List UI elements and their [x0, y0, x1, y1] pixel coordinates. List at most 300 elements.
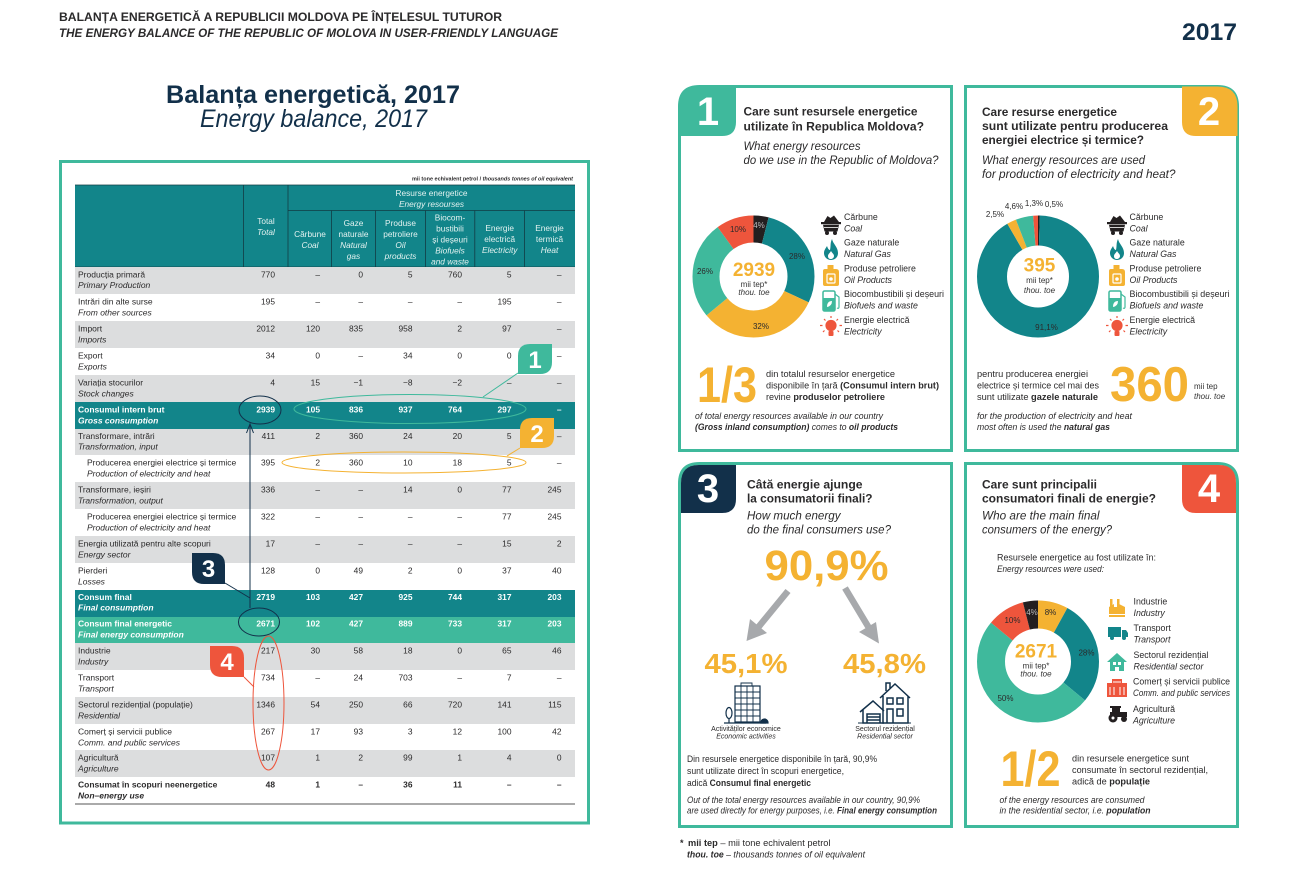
row: gross consumption	[75, 402, 575, 429]
legend 2: Cărbune	[1130, 212, 1163, 222]
row: production of electricity and heat, input: 5	[507, 458, 512, 468]
row: industry: 46	[552, 646, 562, 656]
donut chart 4: 28%	[1078, 648, 1095, 658]
takeaway text 2: sunt utilizate gazele naturale	[977, 392, 1098, 402]
legend 2: Electricity	[1130, 326, 1168, 336]
row: residential: 66	[403, 700, 413, 710]
row: losses: 37	[502, 566, 512, 576]
row: commercial and public services: 17	[311, 726, 320, 736]
row: production of electricity and heat, output: 322	[261, 512, 275, 522]
table header: Energie	[535, 223, 564, 233]
heading 2: sunt utilizate pentru producerea	[982, 119, 1168, 133]
row: production of electricity and heat, input: 10	[403, 458, 413, 468]
heading 1: do we use in the Republic of Moldova?	[744, 153, 939, 167]
row: losses: Pierderi	[78, 566, 107, 576]
row: commercial and public services: 12	[453, 726, 462, 736]
row: primary production: Primary Production	[78, 280, 151, 290]
panel 2: electricity and heat production	[966, 86, 1238, 450]
row: transformation input: 20	[453, 431, 462, 441]
figure 45,8%: 45,8%	[843, 648, 926, 679]
heading 2: Care resurse energetice	[982, 105, 1117, 119]
row: other sources: 195	[261, 296, 275, 306]
table header: electrică	[484, 234, 516, 244]
row: gross consumption: 297	[498, 404, 512, 414]
donut chart 2: thou. toe	[1024, 286, 1056, 295]
row: gross consumption: Consumul intern brut	[78, 404, 165, 414]
row: transformation output: –	[315, 484, 320, 494]
callout 2 with ellipse: 2	[530, 421, 544, 448]
row: non-energy use: Non–energy use	[78, 790, 144, 800]
row: residential: 720	[448, 700, 462, 710]
badge 1	[680, 86, 736, 136]
heading 1: Care sunt resursele energetice	[744, 104, 918, 118]
row: agriculture: 2	[358, 752, 363, 762]
row: commercial and public services: 267	[261, 726, 275, 736]
row: final consumption: 203	[548, 592, 562, 602]
row: transport: 703	[399, 672, 413, 682]
unit note: mii tone echivalent petrol / thousands tonnes of oil equivalent	[412, 176, 573, 182]
donut chart 4: 8%	[1045, 608, 1056, 617]
legend 2	[1106, 212, 1230, 336]
legend 4	[1107, 596, 1231, 726]
donut chart 1: 28%	[789, 252, 805, 261]
row: transport: –	[457, 672, 462, 682]
heading 3: do the final consumers use?	[747, 522, 891, 536]
donut chart 1	[697, 221, 805, 331]
row: commercial and public services: Comm. and public services	[78, 738, 181, 748]
legend 2: Produse petroliere	[1130, 264, 1201, 274]
row: gross consumption: 105	[306, 404, 320, 414]
table header: Total	[257, 227, 276, 237]
row: non-energy use: 1	[315, 780, 320, 790]
row: transport: Transport	[78, 684, 114, 694]
table header: Heat	[541, 245, 559, 255]
heading 4: consumatori finali de energie?	[982, 492, 1156, 506]
table header: Coal	[301, 240, 320, 250]
donut chart 2: mii tep*	[1026, 276, 1053, 285]
row: transformation output	[75, 482, 575, 509]
row: final consumption: 2719	[256, 592, 275, 602]
row: agriculture: 1	[315, 752, 320, 762]
unit note 360: thou. toe	[1194, 392, 1226, 401]
row: residential: 115	[548, 700, 562, 710]
table header: Natural	[340, 240, 368, 250]
panel: energy balance table	[60, 162, 588, 823]
donut chart 1: thou. toe	[738, 288, 770, 297]
row: production of electricity and heat, input	[87, 458, 562, 478]
row: stock changes: Stock changes	[78, 388, 135, 398]
row: non-energy use: Consumat în scopuri neenergetice	[78, 780, 218, 790]
row: industry: 58	[354, 646, 363, 656]
row: exports: 0	[507, 350, 512, 360]
icon: office building	[724, 683, 768, 723]
row: production of electricity and heat, input: 18	[453, 458, 462, 468]
row: other sources: From other sources	[78, 308, 152, 318]
icon: house	[1107, 653, 1127, 671]
legend 2: Biofuels and waste	[1130, 300, 1203, 310]
row: transport: 7	[507, 672, 512, 682]
donut chart 4: mii tep*	[1023, 662, 1049, 670]
footnote	[680, 838, 865, 860]
callout 1 with ellipse	[294, 344, 552, 424]
row: production of electricity and heat, input: 395	[261, 458, 275, 468]
takeaway text 1: din totalul resurselor energetice	[766, 369, 895, 379]
row: stock changes: 4	[270, 378, 275, 388]
row: industry: 30	[311, 646, 320, 656]
heading 3: la consumatorii finali?	[747, 492, 872, 506]
row: production of electricity and heat, output: Producerea energiei electrice și termice	[87, 512, 237, 522]
row: imports: 958	[399, 324, 413, 334]
icon: public building	[1107, 679, 1127, 697]
takeaway text 4: adică de populație	[1072, 776, 1150, 786]
icon: truck	[1108, 627, 1128, 640]
legend 2: Biocombustibili și deșeuri	[1130, 289, 1230, 299]
icon: residential house	[858, 683, 911, 723]
footnote: thou. toe – thousands tonnes of oil equivalent	[687, 850, 865, 860]
row: production of electricity and heat, output: –	[408, 512, 413, 522]
takeaway text 1: (Gross inland consumption) comes to oil products	[695, 422, 898, 432]
heading 2: energiei electrice și termice?	[982, 133, 1144, 147]
row: transformation input: 360	[349, 431, 363, 441]
row: production of electricity and heat, input: 360	[349, 458, 363, 468]
donut chart 2: 1,3%	[1025, 199, 1043, 208]
row: other sources: –	[457, 296, 462, 306]
legend 1: Biocombustibili și deșeuri	[844, 289, 944, 299]
donut chart 1: mii tep*	[741, 280, 767, 289]
table header: termică	[536, 234, 563, 244]
row: other sources: 195	[498, 296, 512, 306]
legend 2: Coal	[1130, 224, 1149, 234]
table header: products	[384, 251, 416, 261]
row: transformation output: Transformare, ieșiri	[78, 484, 151, 494]
takeaway text 4: din resursele energetice sunt	[1072, 754, 1190, 764]
row: non-energy use: –	[358, 780, 363, 790]
row: transport: –	[557, 672, 562, 682]
donut chart 2: 395	[1024, 256, 1056, 276]
row: final consumption: 744	[448, 592, 462, 602]
table header	[75, 185, 575, 267]
row: other sources: –	[315, 296, 320, 306]
key figure 1/3: 1/3	[697, 357, 757, 413]
row: commercial and public services: 42	[552, 726, 562, 736]
row: exports: 34	[403, 350, 413, 360]
row: transformation output: Transformation, output	[78, 496, 164, 506]
arrow left	[746, 591, 788, 641]
row: losses: 49	[354, 566, 363, 576]
table header: Total	[257, 216, 275, 226]
row: final consumption: Consum final	[78, 592, 132, 602]
table header: bustibili	[436, 224, 464, 234]
row: gross consumption: 937	[399, 404, 413, 414]
heading 3	[747, 478, 891, 536]
legend 1: Natural Gas	[844, 249, 892, 259]
row: residential: 141	[498, 700, 512, 710]
takeaway text 4	[1000, 754, 1208, 816]
caption: economic activities: Activităților economice	[711, 726, 781, 733]
row: exports: Exports	[78, 362, 108, 372]
row: gross consumption: Gross consumption	[78, 416, 158, 426]
row: transformation output: 336	[261, 484, 275, 494]
row: losses	[78, 566, 562, 586]
caption: economic activities	[711, 726, 781, 740]
legend 1: Produse petroliere	[844, 264, 916, 274]
row: final consumption: 317	[498, 592, 512, 602]
row: production of electricity and heat, output: –	[315, 512, 320, 522]
footnote: *	[680, 838, 684, 848]
row: stock changes: –	[507, 378, 512, 388]
donut chart 1: 2939	[733, 260, 775, 281]
row: energy sector: Energia utilizată pentru alte scopuri	[78, 538, 211, 548]
heading 3: How much energy	[747, 508, 841, 522]
icon: industry	[1109, 599, 1125, 617]
heading 1: What energy resources	[744, 139, 860, 153]
donut chart 4	[991, 608, 1095, 708]
row: final consumption: Final consumption	[78, 602, 154, 612]
key figure 90,9%: 90,9%	[764, 542, 888, 590]
callout 1 with ellipse: 1	[528, 347, 542, 374]
heading 2: for production of electricity and heat?	[982, 167, 1176, 181]
donut chart 1: 10%	[730, 225, 746, 234]
donut chart 1: 4%	[753, 221, 765, 230]
row: final energy consumption: 317	[498, 618, 512, 628]
row: transport: 24	[354, 672, 363, 682]
legend 2: Energie electrică	[1130, 315, 1195, 325]
row: industry: Industry	[78, 656, 109, 666]
row: transformation input: –	[557, 431, 562, 441]
row: production of electricity and heat, input: Producerea energiei electrice și termice	[87, 458, 237, 468]
row: final consumption: 103	[306, 592, 320, 602]
legend 4: Transport	[1134, 634, 1171, 644]
table header: Cărbune	[294, 229, 326, 239]
icon: tractor	[1108, 706, 1127, 722]
takeaway text 3: are used directly for energy purposes, i.e. Final energy consumption	[687, 806, 937, 816]
table header: petroliere	[383, 229, 418, 239]
heading 1	[744, 104, 939, 167]
row: transformation input: 411	[262, 431, 275, 441]
row: residential	[75, 697, 575, 724]
row: transformation input: Transformare, intrări	[78, 431, 155, 441]
row: commercial and public services: 100	[498, 726, 512, 736]
table header: naturale	[339, 229, 369, 239]
row: transformation input: 24	[403, 431, 413, 441]
donut chart 1: 26%	[697, 267, 713, 276]
takeaway text 3	[687, 754, 937, 816]
row: primary production: 5	[408, 270, 413, 280]
row: transformation output: –	[358, 484, 363, 494]
heading 4	[982, 478, 1156, 536]
report header: BALANȚA ENERGETICĂ A REPUBLICII MOLDOVA PE ÎNȚELESUL TUTUROR	[59, 9, 502, 24]
row: imports: 835	[349, 324, 363, 334]
report header	[59, 9, 559, 40]
callout 3 with arrow and ellipses: 3	[202, 556, 215, 583]
row: agriculture: 4	[507, 752, 512, 762]
row: stock changes: −8	[403, 378, 413, 388]
row: industry: Industrie	[78, 646, 111, 656]
row: residential: 1346	[256, 700, 275, 710]
row: energy sector: Energy sector	[78, 550, 132, 560]
row: agriculture: 107	[261, 752, 275, 762]
row: losses: 40	[552, 566, 562, 576]
badge 3: 3	[697, 467, 719, 511]
row: energy sector: 17	[266, 538, 275, 548]
row: imports: 2	[457, 324, 462, 334]
row: imports: Import	[78, 324, 103, 334]
donut chart 4: 2671	[1015, 642, 1058, 662]
legend 4: Industrie	[1134, 596, 1167, 606]
badge 4: 4	[1198, 467, 1221, 511]
table header: Produse	[385, 218, 416, 228]
table header: Gaze	[344, 218, 364, 228]
badge 4	[1182, 465, 1236, 513]
badge 2: 2	[1198, 90, 1220, 134]
callout 2 with ellipse	[282, 418, 554, 473]
takeaway text 4: consumate în sectorul rezidențial,	[1072, 765, 1208, 775]
row: residential: 250	[349, 700, 363, 710]
takeaway text 2: for the production of electricity and heat	[977, 411, 1133, 421]
row: production of electricity and heat, output: 77	[502, 512, 512, 522]
chart intro text: Energy resources were used:	[997, 564, 1105, 574]
legend 1: Biofuels and waste	[844, 300, 918, 310]
row: gross consumption: 836	[349, 404, 363, 414]
row: primary production: 0	[358, 270, 363, 280]
row: agriculture: 99	[403, 752, 413, 762]
row: energy sector: –	[408, 538, 413, 548]
row: transport: Transport	[78, 672, 115, 682]
row: transport: 734	[261, 672, 275, 682]
takeaway text 1: of total energy resources available in our country	[695, 411, 884, 421]
donut chart 4: 10%	[1004, 616, 1021, 625]
row: gross consumption: 764	[448, 404, 462, 414]
heading 2: What energy resources are used	[982, 153, 1146, 167]
heading 4: Care sunt principalii	[982, 478, 1097, 492]
row: commercial and public services: Comerț și servicii publice	[78, 726, 172, 736]
row: transformation output: 14	[403, 484, 413, 494]
badge 3	[681, 465, 736, 513]
table header: and waste	[431, 256, 469, 266]
legend 4: Agricultură	[1133, 704, 1175, 714]
key figure 360: 360	[1110, 358, 1189, 412]
table header: Energy resourses	[399, 199, 464, 209]
table header: Biocom-	[435, 212, 465, 222]
unit note 360	[1194, 382, 1226, 401]
row: transport	[78, 672, 562, 694]
table header: Oil	[395, 240, 407, 250]
row: exports	[78, 350, 562, 372]
legend 4: Industry	[1134, 608, 1165, 618]
legend 1: Coal	[844, 224, 863, 234]
takeaway text 4: in the residential sector, i.e. population	[1000, 806, 1150, 816]
heading 3: Câtă energie ajunge	[747, 478, 863, 492]
row: transformation input: Transformation, input	[78, 442, 158, 452]
row: energy sector	[75, 536, 575, 563]
takeaway text 4: of the energy resources are consumed	[1000, 795, 1146, 805]
legend 1: Cărbune	[844, 212, 878, 222]
row: residential: Sectorul rezidențial (populație)	[78, 700, 193, 710]
row: final energy consumption: Consum final energetic	[78, 618, 172, 628]
badge 2	[1182, 86, 1238, 136]
row: transformation input: 2	[315, 431, 320, 441]
table header: Resurse energetice	[396, 188, 468, 198]
year: 2017	[1182, 19, 1237, 46]
row: losses: 0	[457, 566, 462, 576]
report header: THE ENERGY BALANCE OF THE REPUBLIC OF MOLOVA IN USER-FRIENDLY LANGUAGE	[59, 26, 559, 40]
row: production of electricity and heat, output: 245	[548, 512, 562, 522]
row: final consumption: 427	[349, 592, 363, 602]
row: imports	[75, 321, 575, 348]
panel 3: final consumers energy	[680, 464, 952, 826]
row: industry: 0	[457, 646, 462, 656]
row: gross consumption: 2939	[256, 404, 275, 414]
row: exports: –	[358, 350, 363, 360]
arrow right	[845, 588, 879, 644]
row: final energy consumption	[75, 617, 575, 643]
row: production of electricity and heat, input: Production of electricity and heat	[87, 468, 211, 478]
title	[166, 81, 460, 133]
row: final energy consumption: 203	[548, 618, 562, 628]
donut chart 4: 50%	[997, 694, 1014, 703]
row: primary production: –	[557, 270, 562, 280]
legend 1: Electricity	[844, 326, 882, 336]
row: exports: 34	[266, 350, 275, 360]
panel 4: main final consumers	[966, 464, 1238, 826]
row: imports: 2012	[256, 324, 275, 334]
takeaway text 1: revine produselor petroliere	[766, 392, 885, 402]
chart intro text: Resursele energetice au fost utilizate în:	[997, 552, 1156, 562]
row: losses: 0	[315, 566, 320, 576]
footnote: mii tep – mii tone echivalent petrol	[688, 838, 830, 848]
takeaway text 2: most often is used the natural gas	[977, 422, 1110, 432]
row: commercial and public services: 3	[408, 726, 413, 736]
row: production of electricity and heat, output: –	[358, 512, 363, 522]
row: losses: 2	[408, 566, 413, 576]
donut chart 2: 2,5%	[986, 210, 1004, 219]
row: imports: Imports	[78, 334, 107, 344]
row: losses: 128	[261, 566, 275, 576]
row: other sources: –	[358, 296, 363, 306]
legend 1: Gaze naturale	[844, 238, 899, 248]
takeaway text 2: pentru producerea energiei	[977, 369, 1088, 379]
row: transformation output: 0	[457, 484, 462, 494]
row: production of electricity and heat, output: Production of electricity and heat	[87, 522, 211, 532]
row: imports: 120	[306, 324, 320, 334]
row: exports: –	[557, 350, 562, 360]
row: commercial and public services: 93	[354, 726, 363, 736]
donut chart 4: thou. toe	[1020, 670, 1052, 678]
legend 4: Sectorul rezidențial	[1134, 650, 1208, 660]
row: primary production	[75, 267, 575, 294]
row: non-energy use: –	[557, 780, 562, 790]
legend 4: Agriculture	[1132, 716, 1175, 726]
row: transformation output: 77	[502, 484, 512, 494]
caption: residential sector: Sectorul rezidențial	[855, 726, 915, 733]
row: industry	[75, 643, 575, 670]
row: stock changes: −1	[353, 378, 363, 388]
unit note 360: mii tep	[1194, 382, 1218, 391]
table header: Energie	[485, 223, 514, 233]
row: residential: 54	[311, 700, 320, 710]
row: residential: Residential	[78, 710, 121, 720]
row: exports: 0	[315, 350, 320, 360]
donut chart 2: 91,1%	[1035, 323, 1058, 332]
row: stock changes: −2	[452, 378, 462, 388]
row: industry: 65	[502, 646, 512, 656]
row: agriculture: 1	[457, 752, 462, 762]
row: stock changes: –	[557, 378, 562, 388]
legend 2: Natural Gas	[1130, 249, 1177, 259]
legend 4: Comerț și servicii publice	[1133, 676, 1230, 686]
row: transformation input: 5	[507, 431, 512, 441]
row: final energy consumption: 733	[448, 618, 462, 628]
